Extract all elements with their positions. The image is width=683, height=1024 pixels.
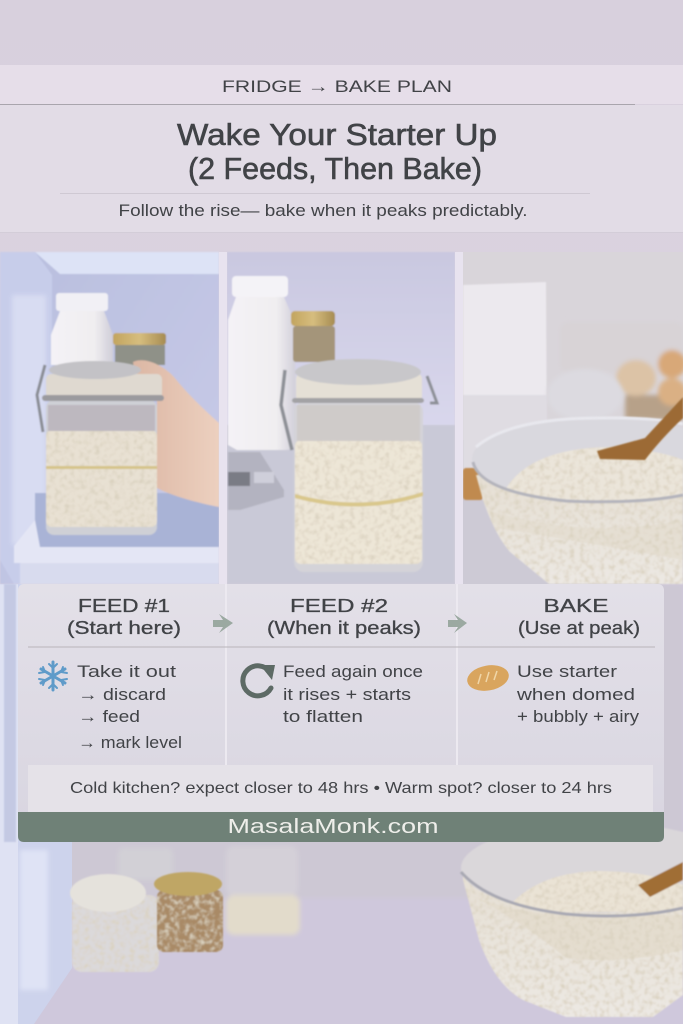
column: feed 2	[243, 596, 423, 726]
text: feed 1 steps: → discard	[78, 686, 166, 704]
text: feed 2 steps: to flatten	[283, 708, 363, 726]
shelf	[14, 493, 219, 584]
icon: refresh	[243, 665, 275, 696]
jar	[281, 359, 437, 572]
photo gaps	[219, 252, 463, 584]
header	[0, 65, 683, 232]
text: feed 1 steps: → feed	[78, 708, 140, 726]
heading: feed 2	[267, 596, 421, 638]
icon: bread	[465, 662, 511, 694]
text: feed 2 steps: Feed again once	[283, 663, 423, 681]
milk bottle	[51, 293, 113, 365]
title band	[0, 105, 683, 232]
column dividers	[225, 584, 458, 765]
photo: jar on counter	[227, 252, 455, 584]
text: bake cues	[516, 663, 640, 726]
heading: feed 1: (Start here)	[67, 618, 181, 638]
photo: jar held in fridge	[0, 252, 219, 584]
wooden board	[463, 468, 483, 500]
column: bake	[465, 596, 640, 726]
milk bottle	[228, 276, 297, 450]
text: feed 2 steps: it rises + starts	[283, 686, 411, 704]
photo: bowl of starter	[463, 252, 683, 584]
tip band	[28, 765, 653, 812]
kitchen scale	[228, 452, 284, 510]
arrow: feed 1 to feed 2	[213, 614, 233, 633]
heading: feed 1	[67, 596, 181, 638]
icon: snowflake	[39, 662, 67, 690]
text: bake cues: + bubbly + airy	[517, 708, 640, 726]
blurred back jars	[118, 846, 300, 935]
blurred eggs and tray	[560, 322, 683, 420]
heading: bake	[518, 596, 640, 638]
footer brand strip	[18, 812, 664, 842]
title band: (2 Feeds, Then Bake)	[188, 151, 482, 186]
text: feed 1 steps: Take it out	[77, 663, 177, 681]
footer brand strip: MasalaMonk.com	[228, 816, 438, 838]
heading: feed 2: (When it peaks)	[267, 618, 421, 638]
heading: feed 2: FEED #2	[290, 596, 388, 616]
title band: Wake Your Starter Up	[177, 117, 497, 152]
heading: bake: BAKE	[544, 596, 608, 616]
eyebrow band	[0, 65, 683, 104]
jar	[37, 361, 164, 535]
heading: feed 1: FEED #1	[78, 596, 170, 616]
gold jar	[291, 311, 335, 362]
heading: bake: (Use at peak)	[518, 618, 640, 638]
hand	[133, 360, 219, 507]
back bowl	[547, 369, 623, 421]
column: feed 1	[39, 596, 182, 752]
eyebrow band: FRIDGE → BAKE PLAN	[222, 77, 452, 96]
text: feed 1 steps: → mark level	[78, 734, 182, 752]
text: feed 2 steps	[283, 663, 423, 726]
flour jar	[70, 874, 159, 972]
text: feed 1 steps	[77, 663, 182, 752]
bowl	[461, 823, 683, 1017]
text: bake cues: Use starter	[517, 663, 618, 681]
small gold jar	[113, 333, 166, 365]
subtitle: Follow the rise— bake when it peaks predictably.	[118, 202, 528, 220]
photo: lower fridge and counter	[0, 584, 683, 1024]
gold lid jar	[154, 872, 223, 952]
tip band: Cold kitchen? expect closer to 48 hrs • Warm spot? closer to 24 hrs	[70, 780, 612, 797]
flour bag	[463, 282, 547, 478]
bowl	[472, 417, 683, 584]
info panel	[18, 584, 664, 842]
arrow: feed 2 to bake	[448, 614, 467, 633]
wooden spoon	[597, 397, 683, 460]
text: bake cues: when domed	[516, 686, 635, 704]
